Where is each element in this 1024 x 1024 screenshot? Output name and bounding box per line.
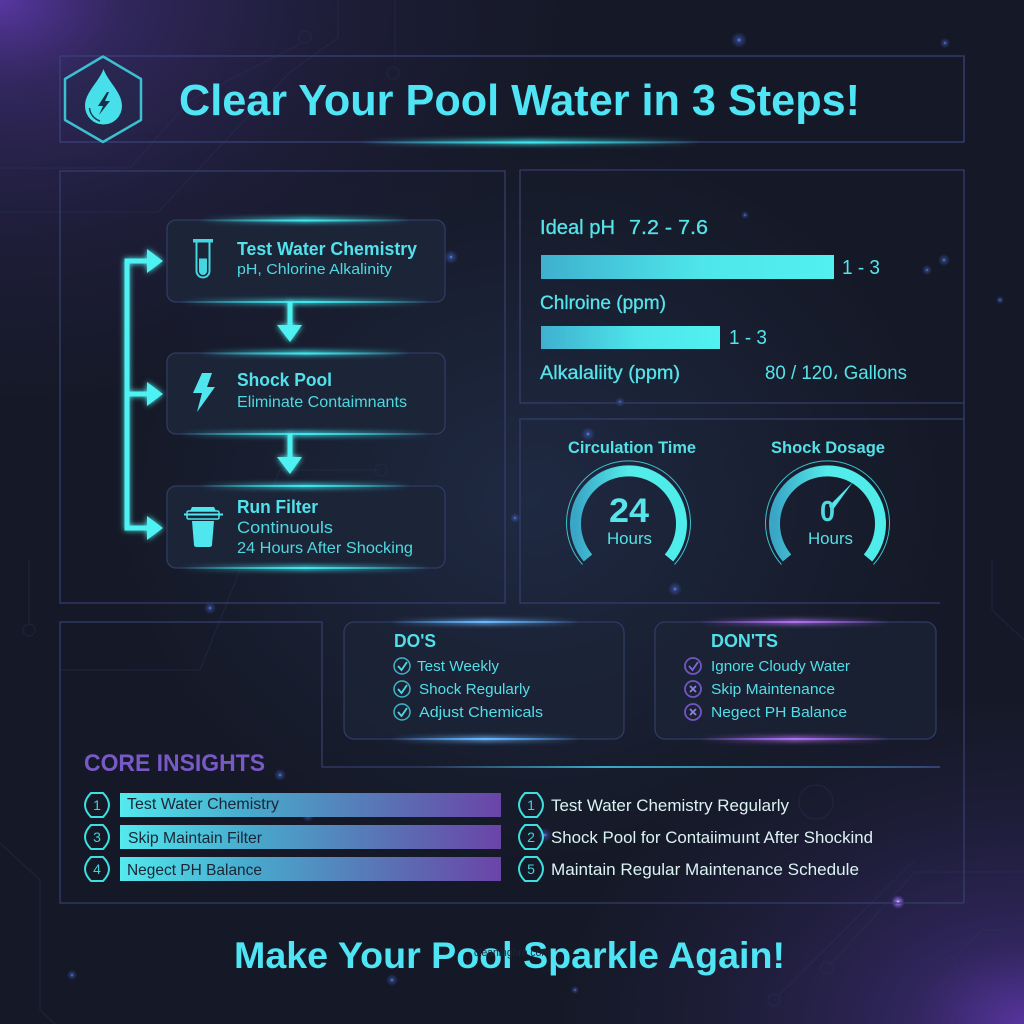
label: ideal pH: Ideal pH: [540, 217, 615, 239]
connector arrows: feedback rail: [124, 249, 163, 540]
step text: Test Water Chemistry: [237, 239, 417, 259]
gauge: circulation time: [566, 438, 696, 564]
insight row 1: Test Water Chemistry: [127, 796, 279, 813]
gauge: shock dosage: [765, 438, 890, 564]
bar value: 1 - 3: [729, 327, 767, 349]
panel: header: [60, 56, 964, 145]
step: shock pool: [167, 350, 445, 437]
item: test weekly: Test Weekly: [417, 658, 499, 675]
takeaway 2: Shock Pool for Contaiimuınt After Shockind: [551, 828, 873, 847]
panel: water levels: [520, 170, 964, 403]
takeaway 1: 1: [527, 797, 535, 813]
panel: process flow: [60, 171, 505, 603]
panel: don'ts: [655, 619, 936, 742]
footer slogan: Make Your Pool Sparkle Again!: [234, 935, 785, 976]
step: shock pool: Eliminate Contaimnants: [237, 394, 407, 411]
watermark: cleaningbro.com: [474, 947, 550, 959]
gauge: shock dosage: Shock Dosage: [771, 438, 885, 457]
bar: chlorine: [541, 326, 720, 349]
icon: water drop in hexagon: [65, 56, 141, 142]
panel: do's: [344, 619, 624, 742]
item: ignore cloudy water: Ignore Cloudy Water: [711, 658, 850, 675]
title: Clear Your Pool Water in 3 Steps!: [179, 76, 860, 125]
panel: core insights: [60, 622, 964, 903]
heading: CORE INSIGHTS: [84, 750, 265, 777]
bar value: 1 - 3: [842, 257, 880, 279]
insight row 2: 3: [93, 829, 101, 845]
insight row 1: 1: [93, 797, 101, 813]
insight row 2: [85, 825, 501, 849]
takeaway 2: 2: [527, 829, 535, 845]
step: test water chemistry: pH, Chlorine Alkalinity: [237, 261, 393, 278]
label: ideal pH: 7.2 - 7.6: [629, 217, 708, 239]
takeaway 3: 5: [527, 861, 535, 877]
bar: pH: [541, 255, 834, 279]
label: gallons: 80 / 120، Gallons: [765, 363, 907, 384]
step: run filter: [167, 483, 445, 571]
arrow: step 2 to 3: [277, 434, 302, 474]
takeaway 3: Maintain Regular Maintenance Schedule: [551, 860, 859, 879]
arrow: step 1 to 2: [277, 302, 302, 342]
item: neglect pH balance: Negect PH Balance: [711, 704, 847, 721]
icon: lightning bolt: [193, 373, 215, 412]
insight row 1: [85, 793, 501, 817]
step text: Shock Pool: [237, 370, 332, 390]
icon: test tube: [193, 239, 213, 278]
label: chlorine: Chlroine (ppm): [540, 293, 666, 314]
item: adjust chemicals: Adjust Chemicals: [419, 704, 543, 721]
takeaway 1: [519, 793, 789, 817]
label: alkalinity: Alkalaliity (ppm): [540, 363, 680, 384]
item: shock regularly: Shock Regularly: [419, 681, 531, 698]
item: skip maintenance: Skip Maintenance: [711, 681, 835, 698]
panel: gauges: [520, 403, 964, 903]
heading: DON'TS: [711, 631, 778, 651]
step text: Run Filter: [237, 497, 318, 517]
insight row 3: Negect PH Balance: [127, 862, 262, 879]
insight row 3: 4: [93, 861, 101, 877]
takeaway 1: Test Water Chemistry Regularly: [551, 796, 789, 815]
insight row 3: [85, 857, 501, 881]
insight row 2: Skip Maintain Filter: [128, 830, 263, 847]
gauge: circulation time: Hours: [607, 529, 652, 548]
gauge: shock dosage: Hours: [808, 529, 853, 548]
step: test water chemistry: [167, 217, 445, 305]
gauge: shock dosage: 0: [820, 496, 835, 528]
heading: DO'S: [394, 631, 436, 651]
gauge: circulation time: Circulation Time: [568, 438, 696, 457]
gauge: circulation time: 24: [609, 492, 649, 530]
step: run filter: Continuouls: [237, 518, 333, 537]
step: run filter: 24 Hours After Shocking: [237, 540, 413, 557]
icon: filter: [184, 507, 223, 547]
